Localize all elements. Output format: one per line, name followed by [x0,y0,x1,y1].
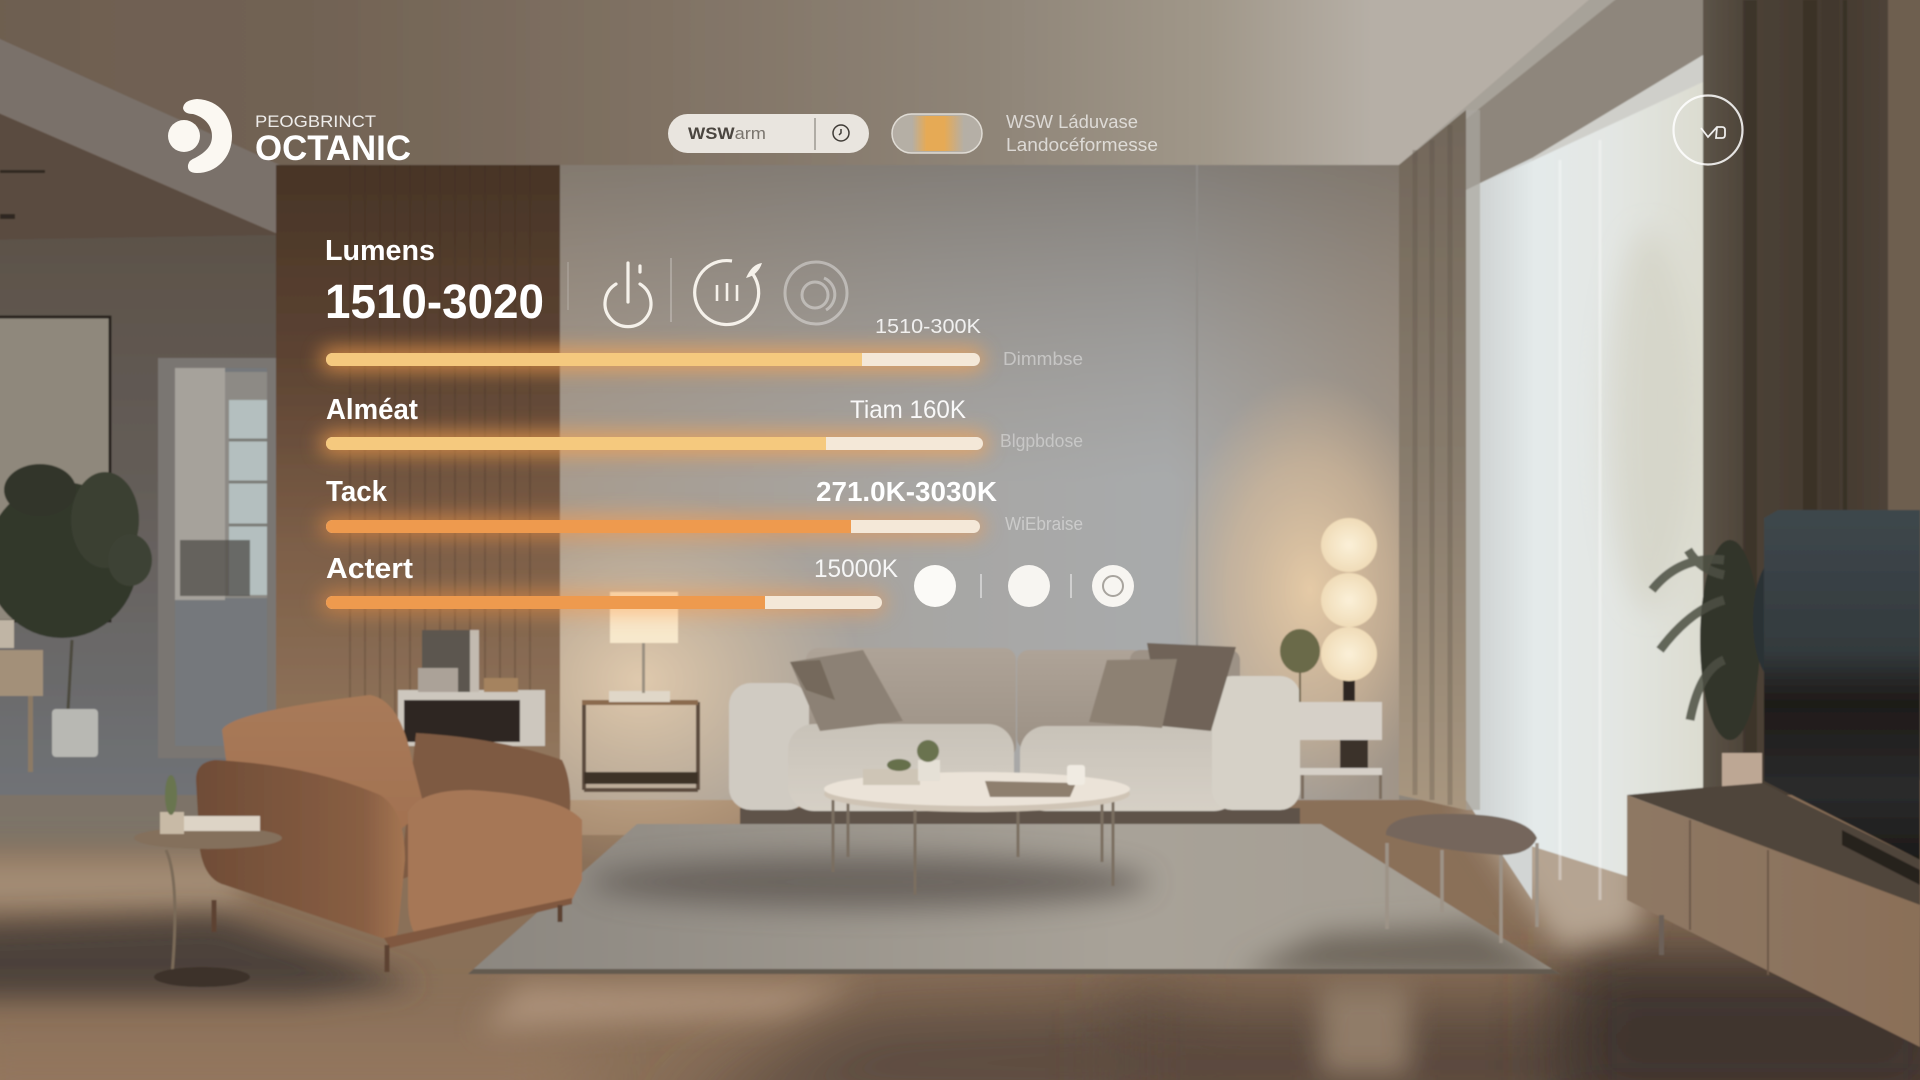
slider row 2 [326,394,1083,451]
sofa [729,643,1300,824]
logo overline: PEOGBRINCT [255,112,376,131]
window and sheer curtains [1399,0,1703,900]
left soffit [0,30,280,240]
back wall [420,165,1445,870]
desk left [0,620,43,772]
armchair [196,695,582,972]
left room wall [0,235,280,795]
icon: timer dial [695,261,762,325]
row 3 bar [326,520,980,533]
slider row 3 [326,476,1083,534]
row 3 side label: WiEbraise [1005,514,1083,534]
dark curtain [1703,0,1920,795]
icon: rings [785,262,847,324]
row 1 value: 1510-300K [875,316,982,338]
icon: top right circle [1674,96,1742,164]
coffee table [824,740,1130,895]
row 4 label: Actert [326,553,413,585]
floor lamp globes [1280,518,1382,799]
row 2 value: Tiam 160K [850,396,966,424]
row 2 bar [326,437,983,450]
plant left [0,464,152,757]
lumens heading [325,235,544,329]
header caption [1006,112,1158,155]
row 1 bar [326,353,980,366]
toggle: warm [892,114,982,153]
row 4 bar [326,596,882,609]
header caption: Landocéformesse [1006,135,1158,155]
side table and lamp [582,592,698,790]
wood slat panel [276,165,560,805]
preset circles [914,565,1134,607]
slider row 4 [326,553,898,609]
tv [1764,510,1920,860]
logo wordmark: OCTANIC [255,129,411,168]
side table left [134,775,282,987]
row 2 label: Alméat [326,394,418,426]
tv console [1627,783,1920,1047]
bar glows [320,348,988,614]
logo [168,99,411,173]
icon: clock [833,125,849,141]
row 4 value: 15000K [814,555,898,583]
row 3 label: Tack [326,476,388,508]
stool [1386,814,1537,943]
lumens heading: Lumens [325,235,435,267]
header caption: WSW Láduvase [1006,112,1138,132]
pill label: WSWarm [688,124,766,143]
logo mark [168,99,232,173]
lumens value: 1510-3020 [325,276,544,329]
pill: mode selector [668,114,869,153]
row 2 side label: Blgpbdose [1000,431,1083,451]
icon row [568,258,847,327]
icon: power [605,263,651,327]
rug [460,820,1570,980]
plant right [1652,540,1797,811]
ceiling [0,0,1620,165]
floor lighting [0,760,1920,1080]
shelf unit [398,630,545,746]
row 3 value: 271.0K-3030K [816,476,997,507]
slider row 1 [326,316,1083,369]
row 1 side label: Dimmbse [1003,349,1083,369]
